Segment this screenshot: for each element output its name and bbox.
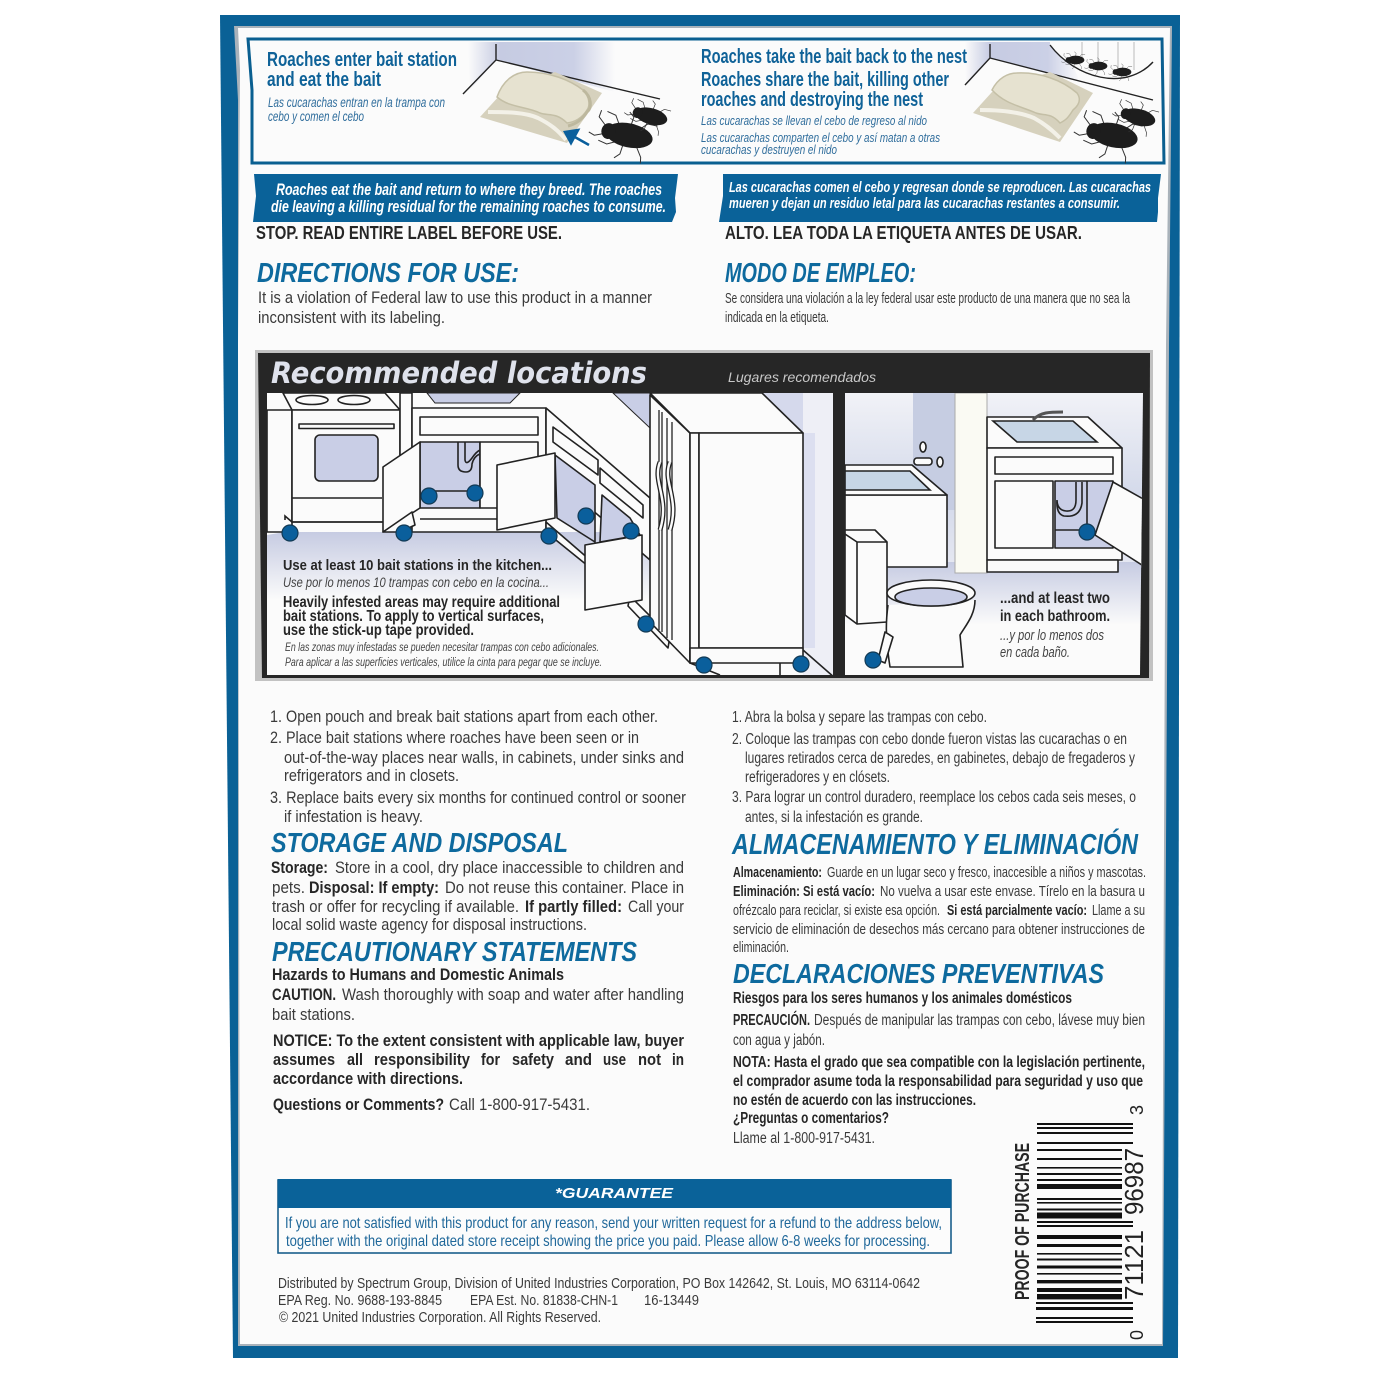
icon: arrow: [565, 130, 589, 145]
warning: English: STOP. READ ENTIRE LABEL BEFORE USE.: [256, 223, 562, 243]
text: precautions English: assumes: [273, 1051, 335, 1069]
text: violation Spanish: [725, 290, 1130, 326]
step 1 Spanish: cebo y comen el cebo: [268, 109, 364, 124]
text: almacenamiento: Llame a su: [1092, 903, 1145, 919]
text: almacenamiento: Guarde en un lugar seco y fresco, inaccesible a niños y mascotas.: [827, 865, 1146, 881]
legal text: EPA Est. No. 81838-CHN-1: [470, 1293, 618, 1309]
step 2 Spanish: Las cucarachas comparten el cebo y así matan a otras: [701, 130, 940, 145]
text: storage and disposal: [271, 859, 684, 934]
text: precautions Spanish: con agua y jabón.: [733, 1032, 825, 1049]
kitchen note: Use at least 10 bait stations in the kitchen...: [283, 557, 552, 574]
steps: Spanish: refrigeradores y en clósets.: [745, 769, 890, 786]
step 2 heading: roaches and destroying the nest: [701, 89, 923, 111]
steps: English: out-of-the-way places near walls, in cabinets, under sinks and: [284, 749, 684, 767]
step 1 heading: Roaches enter bait station: [267, 49, 457, 71]
steps: Spanish: 1. Abra la bolsa y separe las trampas con cebo.: [732, 709, 987, 726]
steps: Spanish: 2. Coloque las trampas con cebo donde fueron vistas las cucarachas o en: [732, 731, 1127, 748]
text: storage and disposal: trash or offer for recycling if available.: [272, 898, 519, 916]
text: precautions Spanish: Llame al 1-800-917-5431.: [733, 1130, 875, 1147]
text: precautions English: NOTICE: To the extent consistent with applicable law, buyer: [273, 1032, 684, 1050]
step 1 Spanish: [268, 95, 445, 124]
text: precautions English: use: [603, 1051, 626, 1069]
text: precautions English: accordance with directions.: [273, 1070, 463, 1088]
text: precautions English: CAUTION.: [272, 986, 336, 1004]
barcode: [1036, 1105, 1149, 1340]
text: precautions Spanish: el comprador asume toda la responsabilidad para seguridad y uso que: [733, 1073, 1143, 1090]
proof of purchase label: PROOF OF PURCHASE: [1012, 1143, 1034, 1300]
barcode digits: 3: [1127, 1105, 1147, 1115]
legal text: © 2021 United Industries Corporation. All Rights Reserved.: [279, 1310, 601, 1326]
banner: English: [253, 174, 678, 222]
text: precautions English: all: [347, 1051, 363, 1069]
text: violation English: [258, 289, 652, 327]
text: precautions English: not: [638, 1051, 661, 1069]
steps: English: 3. Replace baits every six months for continued control or sooner: [270, 789, 686, 807]
heading: precautionary: PRECAUTIONARY STATEMENTS: [272, 936, 637, 967]
text: precautions English: in: [672, 1051, 684, 1069]
heading: directions: DIRECTIONS FOR USE:: [257, 257, 519, 288]
banner: Spanish: [719, 174, 1161, 222]
text: precautions Spanish: PRECAUCIÓN.: [733, 1011, 810, 1029]
steps: English: refrigerators and in closets.: [284, 767, 459, 785]
banner: Spanish: Las cucarachas comen el cebo y regresan donde se reproducen. Las cucarachas: [729, 180, 1151, 196]
text: violation English: It is a violation of Federal law to use this product in a manner: [258, 289, 652, 307]
text: violation Spanish: indicada en la etiqueta.: [725, 309, 829, 326]
steps: English: [270, 708, 686, 826]
barcode digits: 71121: [1119, 1230, 1149, 1300]
steps: Spanish: lugares retirados cerca de paredes, en gabinetes, debajo de fregaderos y: [745, 750, 1135, 767]
package frame: [220, 15, 1180, 1358]
heading: modo de empleo: MODO DE EMPLEO:: [725, 257, 916, 288]
panel: recommended locations: [255, 350, 1153, 681]
text: storage and disposal: Disposal: If empty:: [309, 879, 439, 897]
kitchen note: Use por lo menos 10 trampas con cebo en la cocina...: [283, 574, 549, 590]
kitchen note: use the stick-up tape provided.: [283, 622, 474, 639]
steps: Spanish: [732, 709, 1136, 826]
text: storage and disposal: Storage:: [271, 859, 328, 877]
text: precautions Spanish: ¿Preguntas o comentarios?: [733, 1110, 889, 1127]
text: almacenamiento: Almacenamiento:: [733, 865, 822, 881]
text: precautions Spanish: no estén de acuerdo con las instrucciones.: [733, 1092, 976, 1109]
Spanish title: Lugares recomendados: [728, 369, 876, 385]
text: precautions English: Questions or Comments?: [273, 1096, 444, 1114]
banner: Spanish: mueren y dejan un residuo letal para las cucarachas restantes a consumir.: [729, 196, 1120, 212]
steps: Spanish: 3. Para lograr un control duradero, reemplace los cebos cada seis meses, o: [732, 789, 1136, 806]
text: precautions English: bait stations.: [272, 1006, 355, 1024]
illustration: kitchen: [267, 393, 835, 678]
text: almacenamiento: [733, 865, 1146, 956]
text: precautions English: [272, 966, 684, 1114]
text: almacenamiento: servicio de eliminación de desechos más cercano para obtener instrucciones de: [733, 922, 1145, 938]
bait location dots: [282, 485, 1095, 673]
panel: guarantee: If you are not satisfied with this product for any reason, send your written request for a refund to the address below,: [285, 1215, 942, 1232]
step 1 heading: and eat the bait: [267, 69, 381, 91]
text: almacenamiento: Si está parcialmente vacío:: [947, 903, 1087, 919]
banner: English: die leaving a killing residual for the remaining roaches to consume.: [271, 197, 666, 216]
kitchen note: Para aplicar a las superficies verticales, utilice la cinta para pegar que se incluye.: [285, 655, 602, 669]
fridge: [650, 393, 835, 678]
bathroom note: ...and at least two: [1000, 590, 1110, 607]
barcode digits: 0: [1127, 1330, 1147, 1340]
text: almacenamiento: Eliminación: Si está vacío:: [733, 884, 875, 900]
steps: English: 1. Open pouch and break bait stations apart from each other.: [270, 708, 658, 726]
panel: guarantee: *GUARANTEE: [555, 1185, 674, 1202]
illustration: roaches in nest: [965, 42, 1160, 165]
kitchen note: Heavily infested areas may require additional: [283, 594, 560, 611]
text: precautions Spanish: Riesgos para los seres humanos y los animales domésticos: [733, 990, 1072, 1007]
step 2 heading: [701, 46, 967, 111]
text: almacenamiento: eliminación.: [733, 940, 789, 956]
text: precautions Spanish: NOTA: Hasta el grado que sea compatible con la legislación pertinente,: [733, 1054, 1145, 1071]
text: storage and disposal: Do not reuse this container. Place in: [445, 879, 684, 897]
legal text: EPA Reg. No. 9688-193-8845: [278, 1293, 442, 1309]
text: violation Spanish: Se considera una violación a la ley federal usar este producto de una manera que no sea la: [725, 290, 1130, 307]
text: violation English: inconsistent with its labeling.: [258, 309, 445, 327]
step 1 heading: [267, 49, 457, 91]
text: precautions English: Call 1-800-917-5431.: [449, 1096, 590, 1114]
illustration: bathroom: [845, 393, 1145, 675]
step 1 Spanish: Las cucarachas entran en la trampa con: [268, 95, 445, 110]
barcode digits: [1119, 1105, 1149, 1340]
wall shading left: [252, 41, 1160, 163]
panel: guarantee: together with the original dated store receipt showing the price you paid. Please allow 6-8 weeks for processing.: [286, 1233, 930, 1250]
text: precautions English: and: [565, 1051, 592, 1069]
bathroom note: [1000, 590, 1110, 661]
text: precautions English: safety: [512, 1051, 555, 1069]
bathroom note: en cada baño.: [1000, 645, 1070, 661]
title: Recommended locations: [271, 356, 647, 390]
kitchen note: [283, 557, 602, 669]
step 2 heading: Roaches share the bait, killing other: [701, 69, 949, 91]
text: storage and disposal: Store in a cool, dry place inaccessible to children and: [335, 859, 684, 877]
heading: storage: STORAGE AND DISPOSAL: [271, 827, 568, 858]
bathroom note: ...y por lo menos dos: [1000, 628, 1104, 644]
text: almacenamiento: ofrézcalo para reciclar, si existe esa opción.: [733, 903, 940, 919]
panel: guarantee: [278, 1179, 951, 1253]
step 2 heading: Roaches take the bait back to the nest: [701, 46, 967, 68]
step 2 Spanish: cucarachas y destruyen el nido: [701, 142, 837, 157]
text: storage and disposal: local solid waste agency for disposal instructions.: [272, 916, 587, 934]
text: precautions Spanish: [733, 990, 1145, 1147]
text: precautions English: for: [481, 1051, 500, 1069]
warning: Spanish: ALTO. LEA TODA LA ETIQUETA ANTES DE USAR.: [725, 223, 1082, 243]
step 2 Spanish: [701, 113, 940, 157]
barcode digits: 96987: [1119, 1148, 1149, 1215]
text: almacenamiento: No vuelva a usar este envase. Tírelo en la basura u: [880, 884, 1145, 900]
box border: [248, 39, 1164, 163]
text: precautions Spanish: Después de manipular las trampas con cebo, lávese muy bien: [814, 1012, 1145, 1029]
bathroom note: in each bathroom.: [1000, 608, 1110, 625]
text: precautions English: Wash thoroughly with soap and water after handling: [342, 986, 684, 1004]
banner: English: Roaches eat the bait and return to where they breed. The roaches: [276, 180, 662, 199]
steps: English: 2. Place bait stations where roaches have been seen or in: [270, 729, 639, 747]
text: precautions English: Hazards to Humans and Domestic Animals: [272, 966, 564, 984]
steps: English: if infestation is heavy.: [284, 808, 423, 826]
kitchen note: bait stations. To apply to vertical surfaces,: [283, 608, 544, 625]
legal text: 16-13449: [644, 1293, 699, 1309]
text: precautions English: responsibility: [374, 1051, 471, 1069]
legal text: Distributed by Spectrum Group, Division of United Industries Corporation, PO Box 142642, St. Louis, MO 63114-0642: [278, 1276, 920, 1292]
heading: declaraciones: DECLARACIONES PREVENTIVAS: [733, 958, 1104, 989]
step 2 Spanish: Las cucarachas se llevan el cebo de regreso al nido: [701, 113, 927, 128]
legal text: [278, 1276, 920, 1326]
kitchen note: En las zonas muy infestadas se pueden necesitar trampas con cebo adicionales.: [285, 640, 599, 654]
illustration: bait station entering: [463, 44, 672, 165]
panel: how bait works: [248, 39, 1164, 165]
steps: Spanish: antes, si la infestación es grande.: [745, 809, 923, 826]
text: storage and disposal: Call your: [628, 898, 684, 916]
text: storage and disposal: If partly filled:: [525, 898, 622, 916]
text: storage and disposal: pets.: [272, 879, 305, 897]
heading: almacenamiento: ALMACENAMIENTO Y ELIMINACIÓN: [731, 827, 1139, 861]
